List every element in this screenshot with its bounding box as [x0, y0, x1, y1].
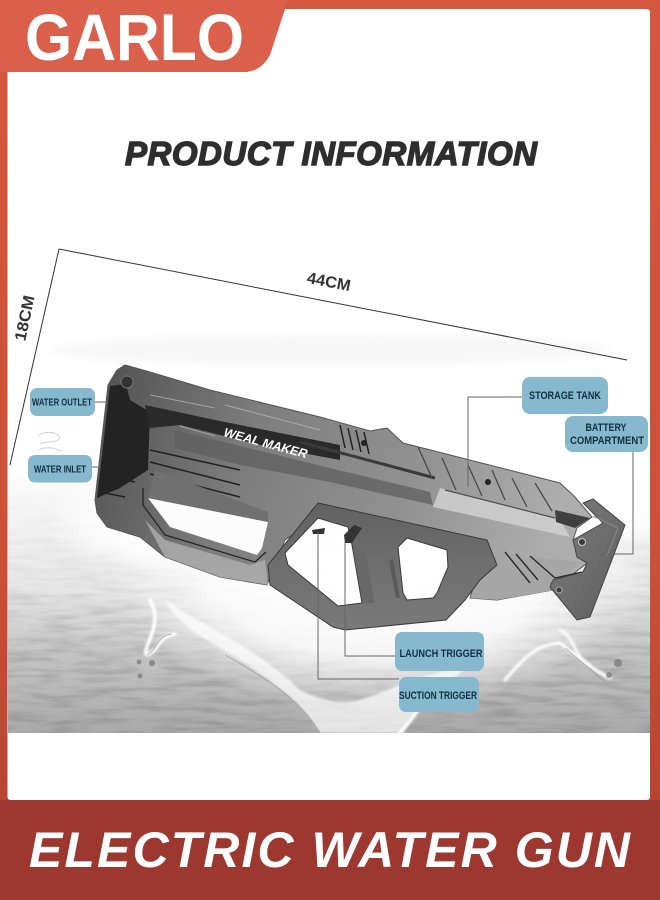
- front grip opening: [148, 498, 268, 555]
- stock: [550, 499, 625, 620]
- launch trigger: [344, 525, 362, 543]
- logo tab: [0, 0, 288, 74]
- screw: [485, 479, 491, 485]
- grip translucent tone: [145, 520, 268, 585]
- grip rib texture: [353, 550, 374, 603]
- label: launch trigger: LAUNCH TRIGGER: [400, 648, 483, 660]
- front grip inner edge: [143, 488, 266, 562]
- stock screw: [578, 538, 586, 546]
- splash mark left: [38, 432, 62, 452]
- inner barrel: [175, 430, 433, 505]
- dark barrel band: [145, 405, 340, 460]
- label: water outlet: WATER OUTLET: [32, 398, 92, 408]
- dimension lines: [10, 249, 627, 465]
- title: PRODUCT INFORMATION: [125, 135, 538, 172]
- height label: 18CM: [12, 294, 39, 343]
- barrel highlights: [150, 395, 320, 436]
- label: storage tank: STORAGE TANK: [529, 390, 601, 402]
- footer band: [0, 800, 660, 900]
- label: suction trigger: [399, 677, 479, 712]
- label: battery compartment: [565, 416, 648, 452]
- lower rear section: [470, 553, 580, 600]
- label: suction trigger: SUCTION TRIGGER: [399, 690, 477, 702]
- label: water inlet: WATER INLET: [34, 464, 86, 476]
- muzzle dark block: [97, 384, 150, 498]
- label: launch trigger: [395, 632, 484, 671]
- water background: [8, 494, 650, 733]
- tank fins: [418, 447, 552, 511]
- footer title: ELECTRIC WATER GUN: [29, 822, 631, 878]
- trigger frame and grip: [268, 503, 497, 630]
- label: storage tank: [522, 377, 608, 414]
- faint mist band: [50, 334, 610, 366]
- width label: 44CM: [305, 270, 352, 295]
- water sheets: [165, 600, 470, 733]
- storage tank highlights: [433, 488, 570, 537]
- label: water outlet: [30, 388, 95, 416]
- logo text: GARLO: [25, 0, 244, 74]
- label: water inlet: [28, 455, 92, 482]
- diagonal rod: [300, 442, 435, 478]
- label: battery compartment: BATTERY: [586, 422, 627, 434]
- ribbed chamber: [100, 425, 369, 497]
- water gun: [95, 365, 625, 630]
- muzzle cap: [121, 376, 133, 388]
- water droplets: [136, 659, 622, 678]
- leader lines: [92, 397, 633, 679]
- brand text on gun: WEAL MAKER: [222, 425, 309, 461]
- translucent body: [95, 365, 592, 600]
- suction trigger: [312, 528, 325, 534]
- label: battery compartment: COMPARTMENT: [570, 435, 644, 447]
